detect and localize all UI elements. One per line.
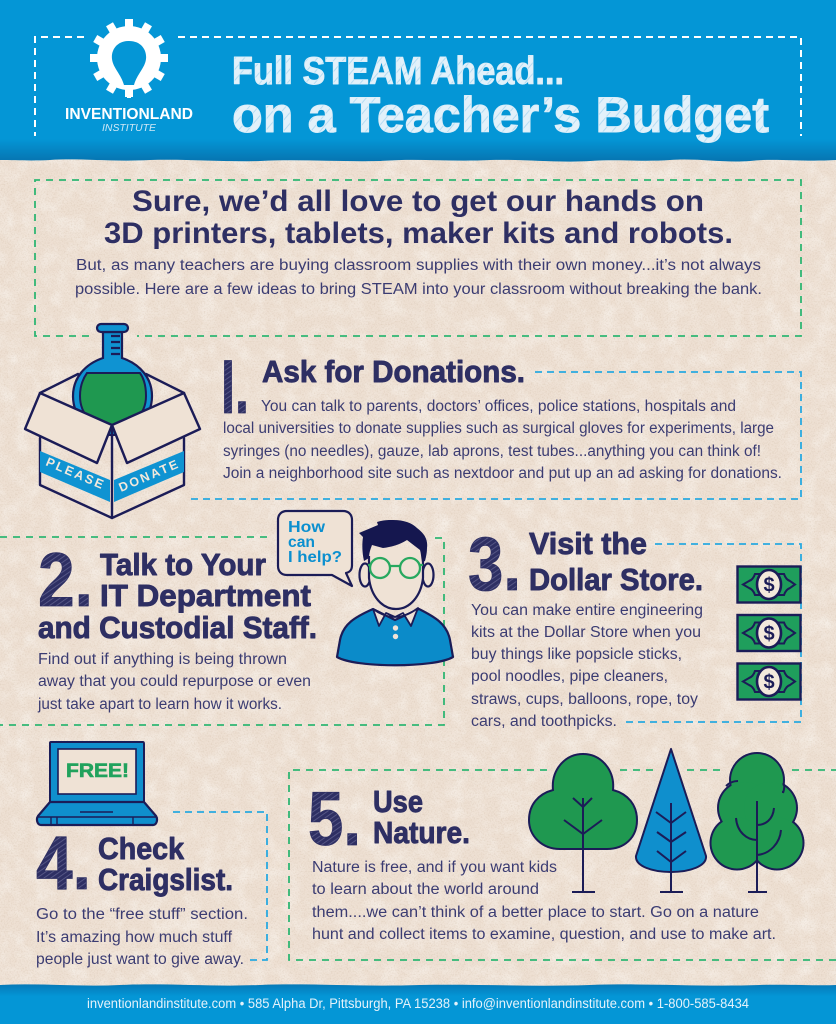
tree: conifer xyxy=(636,749,706,892)
heading: Nature. xyxy=(373,815,470,850)
intro heading: 3D printers, tablets, maker kits and robots. xyxy=(104,217,733,250)
body text: Join a neighborhood site such as nextdoor and put up an ad asking for donations. xyxy=(223,465,782,482)
body text: local universities to donate supplies such as surgical gloves for experiments, large xyxy=(223,420,774,437)
glasses xyxy=(368,558,423,578)
heading xyxy=(38,547,317,645)
buttons xyxy=(393,625,398,639)
bill 3: $ xyxy=(763,672,775,694)
panel: introduction xyxy=(35,180,801,336)
panel: 4 check craigslist xyxy=(36,812,267,968)
number 4: 4. xyxy=(36,821,91,906)
callout: How can I help?: can xyxy=(288,534,315,551)
icon: laptop with FREE!: FREE! xyxy=(66,761,129,782)
body text: away that you could repurpose or even xyxy=(38,673,311,690)
intro heading: Sure, we’d all love to get our hands on xyxy=(132,185,704,218)
bill 1: $ xyxy=(763,574,775,596)
icon: three trees xyxy=(529,749,804,892)
logo: Inventionland Institute: INVENTIONLAND xyxy=(65,106,193,123)
intro text xyxy=(75,257,762,298)
body text: syringes (no needles), gauze, lab aprons, test tubes...anything you can think of! xyxy=(223,443,761,460)
body text: You can talk to parents, doctors’ offices, police stations, hospitals and xyxy=(261,398,736,415)
logo: Inventionland Institute xyxy=(65,19,193,134)
shirt xyxy=(337,609,453,665)
intro heading xyxy=(104,185,733,250)
body text: It’s amazing how much stuff xyxy=(36,929,233,946)
body text: Go to the “free stuff” section. xyxy=(36,906,248,923)
ears xyxy=(360,564,434,586)
intro text: possible. Here are a few ideas to bring STEAM into your classroom without breaking the bank. xyxy=(75,281,762,298)
title: Full STEAM Ahead... xyxy=(232,50,564,93)
heading xyxy=(373,784,470,850)
body text: Find out if anything is being thrown xyxy=(38,651,287,668)
icon: three dollar bills xyxy=(738,566,800,700)
footer banner: inventionlandinstitute.com • 585 Alpha Dr, Pittsburgh, PA 15238 • info@inventionlandinstitute.com • 1-800-585-8434 xyxy=(87,996,749,1011)
body text: them....we can’t think of a better place to start. Go on a nature xyxy=(312,904,759,921)
header banner xyxy=(0,0,836,162)
body text: people just want to give away. xyxy=(36,951,244,968)
number 5: 5. xyxy=(308,777,361,862)
body text xyxy=(471,602,703,730)
logo: Inventionland Institute: INSTITUTE xyxy=(102,122,157,134)
body text xyxy=(312,859,776,943)
title: on a Teacher’s Budget xyxy=(232,87,769,143)
callout: How can I help?: How xyxy=(288,519,326,536)
tree: layered xyxy=(710,752,804,892)
body text: Nature is free, and if you want kids xyxy=(312,859,557,876)
icon: laptop with FREE! xyxy=(37,742,157,825)
box xyxy=(25,374,200,518)
body text: You can make entire engineering xyxy=(471,602,703,619)
box label: PLEASE xyxy=(44,455,107,492)
heading: Craigslist. xyxy=(98,862,233,897)
body text: hunt and collect items to examine, question, and use to make art. xyxy=(312,926,776,943)
number 1: I. xyxy=(221,345,249,430)
body text: cars, and toothpicks. xyxy=(471,713,617,730)
panel: 1 ask for donations xyxy=(190,345,801,499)
icon: gear with light bulb xyxy=(90,19,168,98)
heading: and Custodial Staff. xyxy=(38,610,317,645)
body text: straws, cups, balloons, rope, toy xyxy=(471,691,698,708)
number 2: 2. xyxy=(38,538,93,623)
heading: Talk to Your xyxy=(100,547,266,582)
box label xyxy=(44,455,182,495)
box label: DONATE xyxy=(117,456,182,495)
face xyxy=(369,548,423,609)
body text: to learn about the world around xyxy=(312,881,539,898)
body text xyxy=(37,651,311,713)
number 3: 3. xyxy=(468,522,521,607)
flask xyxy=(73,324,152,435)
body text xyxy=(223,398,782,482)
panel: 2 talk to IT and custodial staff xyxy=(0,537,444,725)
intro text: But, as many teachers are buying classroom supplies with their own money...it’s not always xyxy=(76,257,761,274)
callout: How can I help?: I help? xyxy=(288,549,342,566)
panel: 5 use nature xyxy=(289,770,836,960)
tree: round xyxy=(529,754,637,892)
body text: buy things like popsicle sticks, xyxy=(471,646,682,663)
body text: kits at the Dollar Store when you xyxy=(471,624,701,641)
heading: Ask for Donations. xyxy=(262,354,525,389)
body text: just take apart to learn how it works. xyxy=(37,696,282,713)
heading: Visit the xyxy=(529,526,647,561)
panel: 3 visit the dollar store xyxy=(468,522,801,730)
heading: IT Department xyxy=(100,578,311,613)
hair xyxy=(359,520,427,562)
icon: person with glasses xyxy=(337,520,453,665)
heading: Check xyxy=(98,831,185,866)
footer banner xyxy=(0,984,836,1024)
heading: Use xyxy=(373,784,423,819)
body text: pool noodles, pipe cleaners, xyxy=(471,668,668,685)
icon: donation box with flask xyxy=(25,324,200,518)
title xyxy=(232,50,769,143)
heading xyxy=(529,526,703,597)
callout: How can I help? xyxy=(278,511,352,586)
heading xyxy=(98,831,233,897)
collar xyxy=(373,608,418,626)
body text xyxy=(36,906,248,968)
heading: Dollar Store. xyxy=(529,562,703,597)
bill 2: $ xyxy=(763,623,775,645)
